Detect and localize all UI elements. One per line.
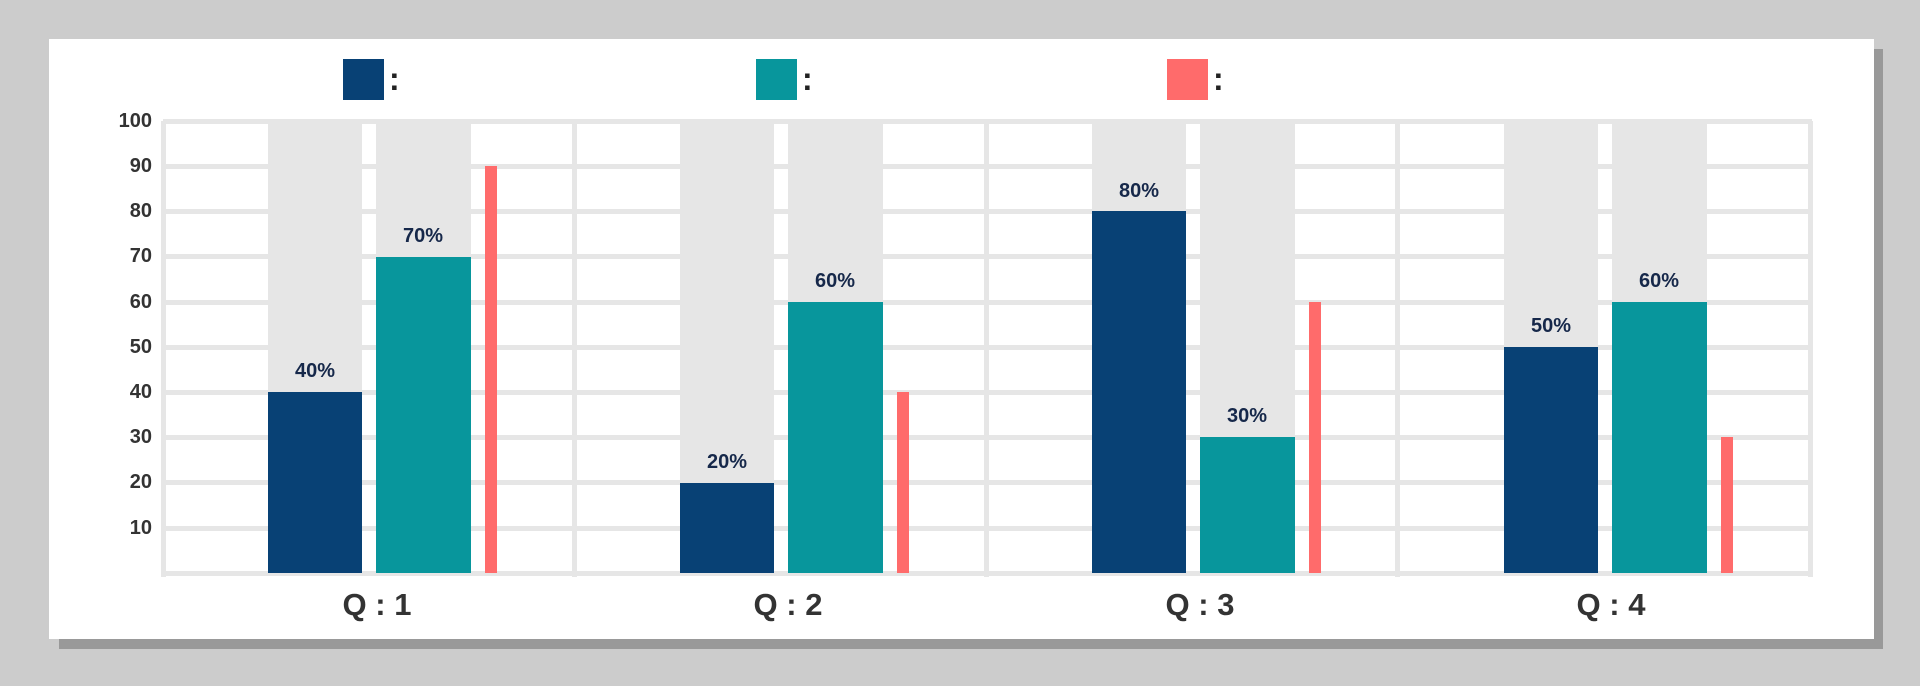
group Q1 (268, 124, 497, 573)
y axis labels: 40 (130, 381, 152, 403)
y axis labels: 100 (119, 110, 152, 132)
y axis labels: 80 (130, 200, 152, 222)
legend item navy (343, 59, 400, 100)
legend item red (1167, 59, 1224, 100)
group Q4 (1504, 124, 1733, 573)
group Q4: 50% (1531, 315, 1571, 337)
x axis labels: Q : 1 (343, 587, 411, 622)
x axis labels: Q : 3 (1166, 587, 1234, 622)
y axis labels: 70 (130, 245, 152, 267)
x axis labels (343, 587, 1646, 622)
legend item teal: : (802, 61, 813, 97)
group Q1: 40% (295, 360, 335, 382)
group Q1: 70% (403, 225, 443, 247)
y axis labels: 10 (130, 517, 152, 539)
y axis labels: 50 (130, 336, 152, 358)
group Q2: 60% (815, 270, 855, 292)
y axis labels: 60 (130, 291, 152, 313)
x axis labels: Q : 2 (754, 587, 822, 622)
legend item teal (756, 59, 813, 100)
y axis labels: 20 (130, 471, 152, 493)
y axis labels: 90 (130, 155, 152, 177)
x axis labels: Q : 4 (1577, 587, 1645, 622)
legend item navy: : (389, 61, 400, 97)
group Q2 (680, 124, 909, 573)
group Q3: 80% (1119, 180, 1159, 202)
group Q2: 20% (707, 451, 747, 473)
y axis labels: 30 (130, 426, 152, 448)
group Q4: 60% (1639, 270, 1679, 292)
group Q3: 30% (1227, 405, 1267, 427)
group Q3 (1092, 124, 1321, 573)
legend (343, 59, 1224, 100)
legend item red: : (1213, 61, 1224, 97)
y axis labels (119, 110, 152, 539)
